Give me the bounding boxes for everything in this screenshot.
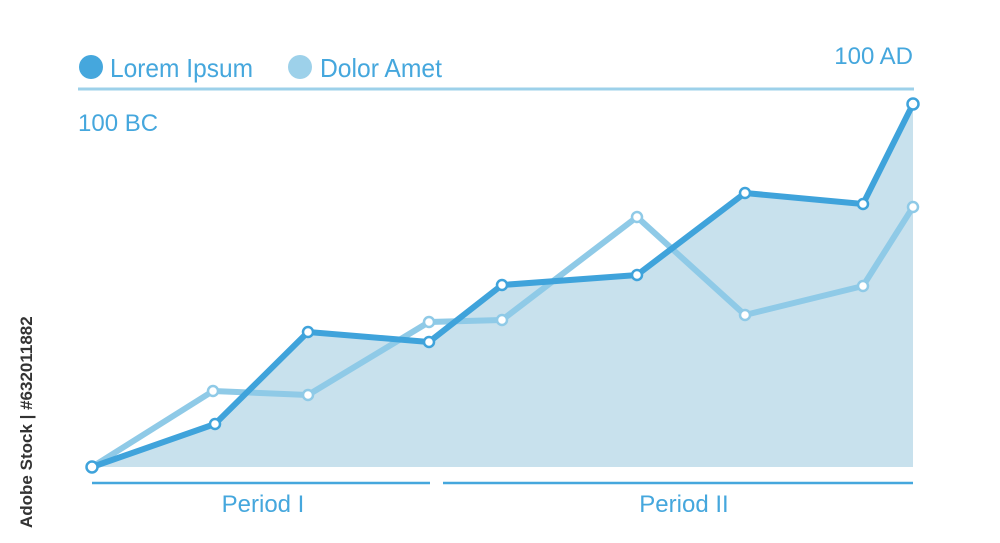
label: 100 BC: 100 BC bbox=[78, 110, 158, 137]
line: Lorem Ipsum bbox=[86, 98, 918, 472]
line: Dolor Amet bbox=[92, 202, 918, 467]
legend item: Lorem Ipsum: Lorem Ipsum bbox=[110, 53, 253, 83]
label: Period I: Period I bbox=[222, 491, 304, 518]
label: 100 AD: 100 AD bbox=[834, 43, 913, 70]
label: Period II: Period II bbox=[639, 491, 729, 518]
legend item: Dolor Amet: Dolor Amet bbox=[320, 53, 443, 83]
axis: periods bbox=[92, 483, 913, 518]
area fill bbox=[92, 104, 913, 467]
watermark text: Adobe Stock | #632011882 bbox=[17, 316, 36, 528]
legend bbox=[79, 53, 443, 83]
